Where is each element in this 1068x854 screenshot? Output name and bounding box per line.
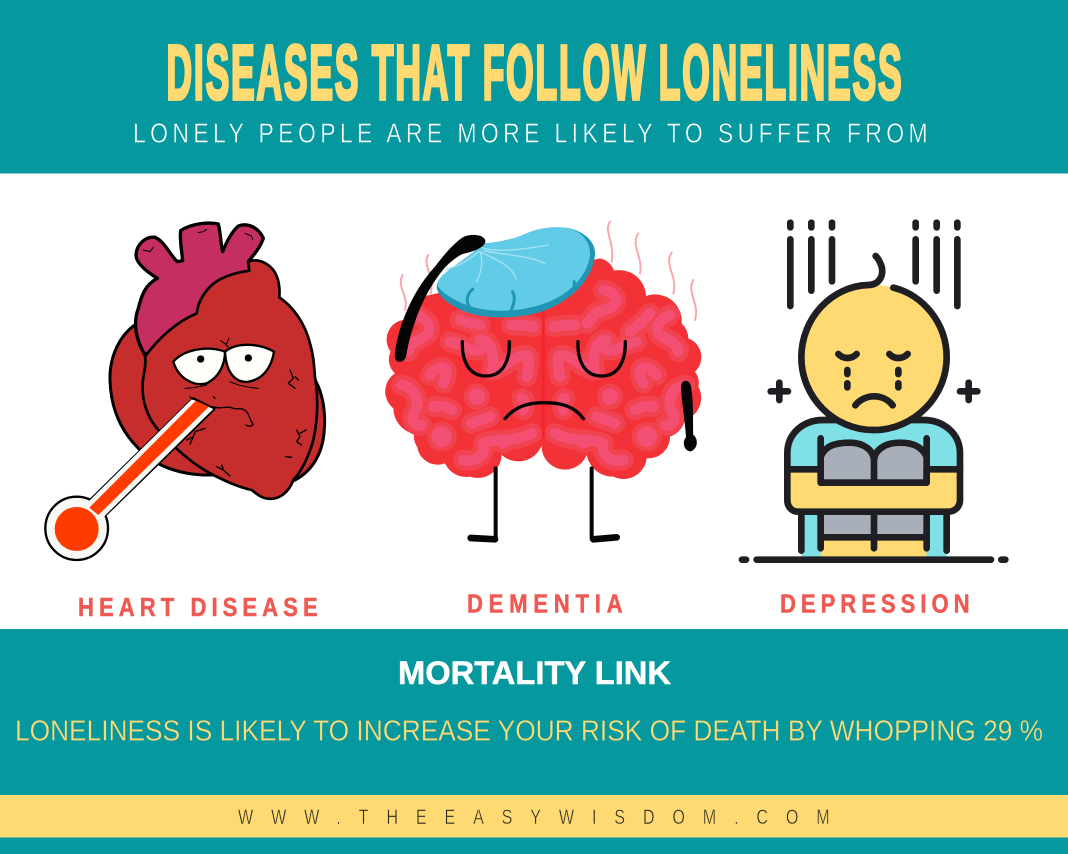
lower body colours [801,512,947,557]
brain outer shape [385,258,701,479]
label: heart disease: HEART DISEASE [78,593,318,622]
panel: header [0,0,1068,174]
footer band [0,795,1068,838]
brain centre line [539,310,548,437]
heart mouth and cracks [187,370,306,476]
heart back lobes [110,323,325,482]
ice pack [437,227,595,317]
sparkles and ground [742,383,1005,560]
icon: sick heart with thermometer [45,223,325,560]
icon: crying person hugging knees [742,223,1005,560]
knees [821,443,927,483]
crossed arms [787,469,960,512]
legs [801,513,947,551]
legs [470,468,617,539]
thermometer [45,398,214,560]
website url: WWW.THEEASYWISDOM.COM [238,806,830,830]
heart eyes [173,338,274,388]
panel: mortality link [0,629,1068,854]
mortality heading: MORTALITY LINK [398,655,672,691]
heart aorta [136,223,263,355]
title: DISEASES THAT FOLLOW LONELINESS [166,30,902,116]
head [801,285,946,430]
torso [787,420,960,469]
right arm [681,381,697,451]
left arm [395,235,485,362]
rain lines [790,223,957,306]
subtitle: LONELY PEOPLE ARE MORE LIKELY TO SUFFER FROM [133,118,928,149]
heart vessel marks [143,229,253,252]
label: depression: DEPRESSION [780,590,970,619]
heat waves [401,222,696,320]
label: dementia: DEMENTIA [467,590,623,619]
heart front body [143,260,317,499]
face [838,354,908,405]
brain round lobes [429,386,659,449]
icon: brain with ice pack [385,222,701,539]
brain folds [402,290,685,461]
eyes and mouth [462,342,625,419]
